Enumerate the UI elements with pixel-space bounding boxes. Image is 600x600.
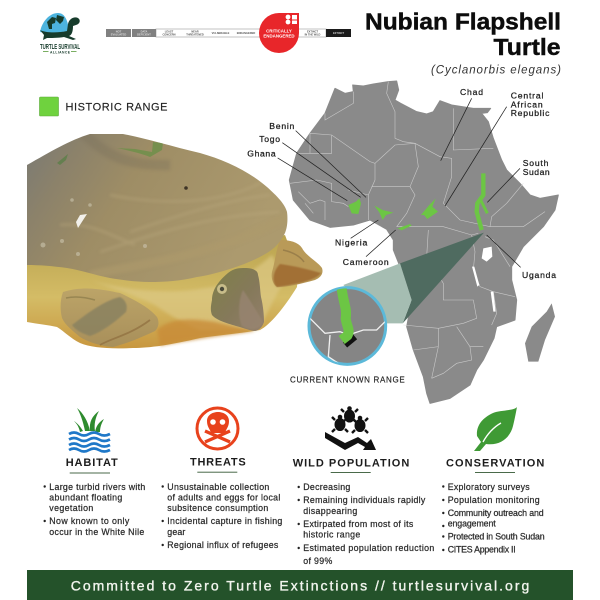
label: Chad: Chad (460, 87, 483, 97)
map of Africa (278, 81, 558, 403)
lakes (472, 247, 496, 312)
status: not evaluated: EVALUATED (111, 32, 126, 36)
left turtle (332, 415, 348, 432)
conservation text: Community outreach and (448, 508, 544, 518)
heading: threats: THREATS (190, 456, 246, 468)
heading: habitat: HABITAT (66, 457, 118, 469)
label: Ghana: Ghana (247, 148, 276, 158)
panel: wild population (293, 407, 434, 566)
label: Uganda: Uganda (522, 270, 556, 280)
green ranges (348, 173, 487, 230)
label: Central African Republic (511, 90, 550, 118)
label: Central African Republic: African (511, 99, 543, 109)
turtle body (27, 235, 298, 348)
status: extinct in the wild (305, 30, 321, 36)
turtle rear flipper (61, 288, 158, 347)
turtle photo illustration (27, 130, 323, 348)
threats text: gear (167, 527, 185, 537)
zoom circle: current known range (309, 288, 386, 364)
status: critically endangered: ENDANGERED (263, 34, 295, 38)
turtle under-shell shade (90, 255, 285, 330)
map labels (247, 87, 556, 385)
habitat text: Now known to only (49, 516, 130, 526)
threats text: subsitence consumption (167, 503, 268, 513)
footer banner: Committed to Zero Turtle Extinctions // turtlesurvival.org (71, 578, 529, 594)
icon: skull and crossbones (197, 408, 238, 449)
conservation text: Exploratory surveys (448, 482, 530, 492)
habitat text: occur in the White Nile (49, 527, 144, 537)
center turtle (341, 407, 358, 423)
Madagascar (525, 303, 555, 362)
status: extinct: EXTINCT (333, 31, 344, 35)
title: Turtle (494, 34, 560, 60)
country borders (290, 82, 545, 378)
icon: water and reeds (69, 408, 110, 452)
threats text: Regional influx of refugees (167, 540, 279, 550)
leader lines (278, 98, 521, 267)
legend: historic range: HISTORIC RANGE (66, 102, 168, 114)
wild population text: Estimated population reduction (303, 543, 434, 553)
habitat text: vegetation (49, 503, 93, 513)
scientific name: (Cyclanorbis elegans) (431, 64, 561, 76)
label: Nigeria: Nigeria (335, 238, 368, 248)
status: data deficient: DEFICIENT (137, 32, 151, 36)
label: South Sudan: South (523, 158, 549, 168)
habitat text: abundant floating (49, 492, 122, 502)
label: South Sudan: Sudan (523, 167, 550, 177)
icon: turtles and declining arrow (325, 407, 376, 450)
status: near threatened: THREATENED (186, 32, 204, 36)
status: extinct in the wild: EXTINCT (307, 30, 318, 34)
status: endangered: ENDANGERED (237, 31, 255, 35)
logo turtle icon (40, 13, 80, 40)
title: Nubian Flapshell (365, 8, 561, 34)
status: least concern: LEAST (165, 30, 174, 34)
wild population text: historic range (303, 530, 360, 540)
label: Central African Republic: Republic (511, 108, 550, 118)
status: extinct (326, 29, 351, 37)
threats text: of adults and eggs for local (167, 492, 280, 502)
label: Cameroon: Cameroon (343, 257, 389, 267)
logo wordmark: ALLIANCE (50, 50, 71, 54)
turtle head (211, 268, 264, 331)
continent (289, 81, 558, 403)
right turtle (352, 416, 368, 433)
label: Togo: Togo (259, 134, 280, 144)
icon: leaf (474, 407, 517, 451)
wild population text: of 99% (303, 556, 332, 566)
wild population text: Extirpated from most of its (303, 519, 414, 529)
logo wordmark: TURTLE SURVIVAL (40, 42, 80, 51)
status: not evaluated (106, 29, 131, 37)
conservation text: Population monitoring (448, 495, 540, 505)
status: least concern (162, 30, 176, 36)
habitat text (44, 482, 145, 537)
threats text: Incidental capture in fishing (167, 516, 282, 526)
status: least concern: CONCERN (162, 32, 176, 36)
label: current known range: CURRENT KNOWN RANGE (290, 376, 405, 385)
zoom cone: over water (343, 263, 412, 323)
conservation text: CITES Appendix II (448, 544, 516, 554)
panel: conservation (442, 407, 545, 554)
status: data deficient: DATA (141, 30, 148, 34)
status: critically endangered (259, 13, 299, 53)
panel: habitat (44, 408, 145, 537)
habitat text: Large turbid rivers with (49, 482, 145, 492)
heading: conservation: CONSERVATION (446, 458, 544, 470)
label: South Sudan (523, 158, 550, 177)
IUCN status bar (106, 13, 351, 53)
panel: threats (162, 408, 282, 550)
wild population text: disappearing (303, 506, 357, 516)
status: not evaluated: NOT (116, 30, 122, 34)
turtle lower orange band (157, 320, 255, 346)
logo wordmark (40, 42, 80, 54)
declining arrow (325, 432, 376, 450)
status: vulnerable: VULNERABLE (212, 31, 230, 35)
threats text (162, 482, 282, 550)
status: data deficient (132, 29, 156, 37)
conservation text (442, 482, 545, 554)
status: critically endangered: CRITICALLY (266, 28, 292, 34)
label: Benin: Benin (269, 121, 295, 131)
label: Central African Republic: Central (511, 90, 543, 100)
threats text: Unsustainable collection (167, 482, 269, 492)
status: extinct in the wild: IN THE WILD (305, 32, 321, 36)
turtle front flipper (272, 240, 323, 287)
turtle shell (27, 130, 290, 282)
status: near threatened (186, 30, 204, 36)
wild population text (298, 482, 434, 566)
legend: historic range (40, 97, 168, 116)
conservation text: Protected in South Sudan (448, 532, 545, 542)
logo: Turtle Survival Alliance (40, 13, 80, 54)
zoom cone: over land (400, 233, 484, 323)
footer banner (27, 570, 573, 600)
conservation text: engagement (448, 518, 496, 528)
wild population text: Remaining individuals rapidly (303, 495, 426, 505)
wild population text: Decreasing (303, 482, 350, 492)
heading: wild population: WILD POPULATION (293, 458, 409, 470)
status: near threatened: NEAR (191, 30, 199, 34)
title (365, 8, 561, 60)
